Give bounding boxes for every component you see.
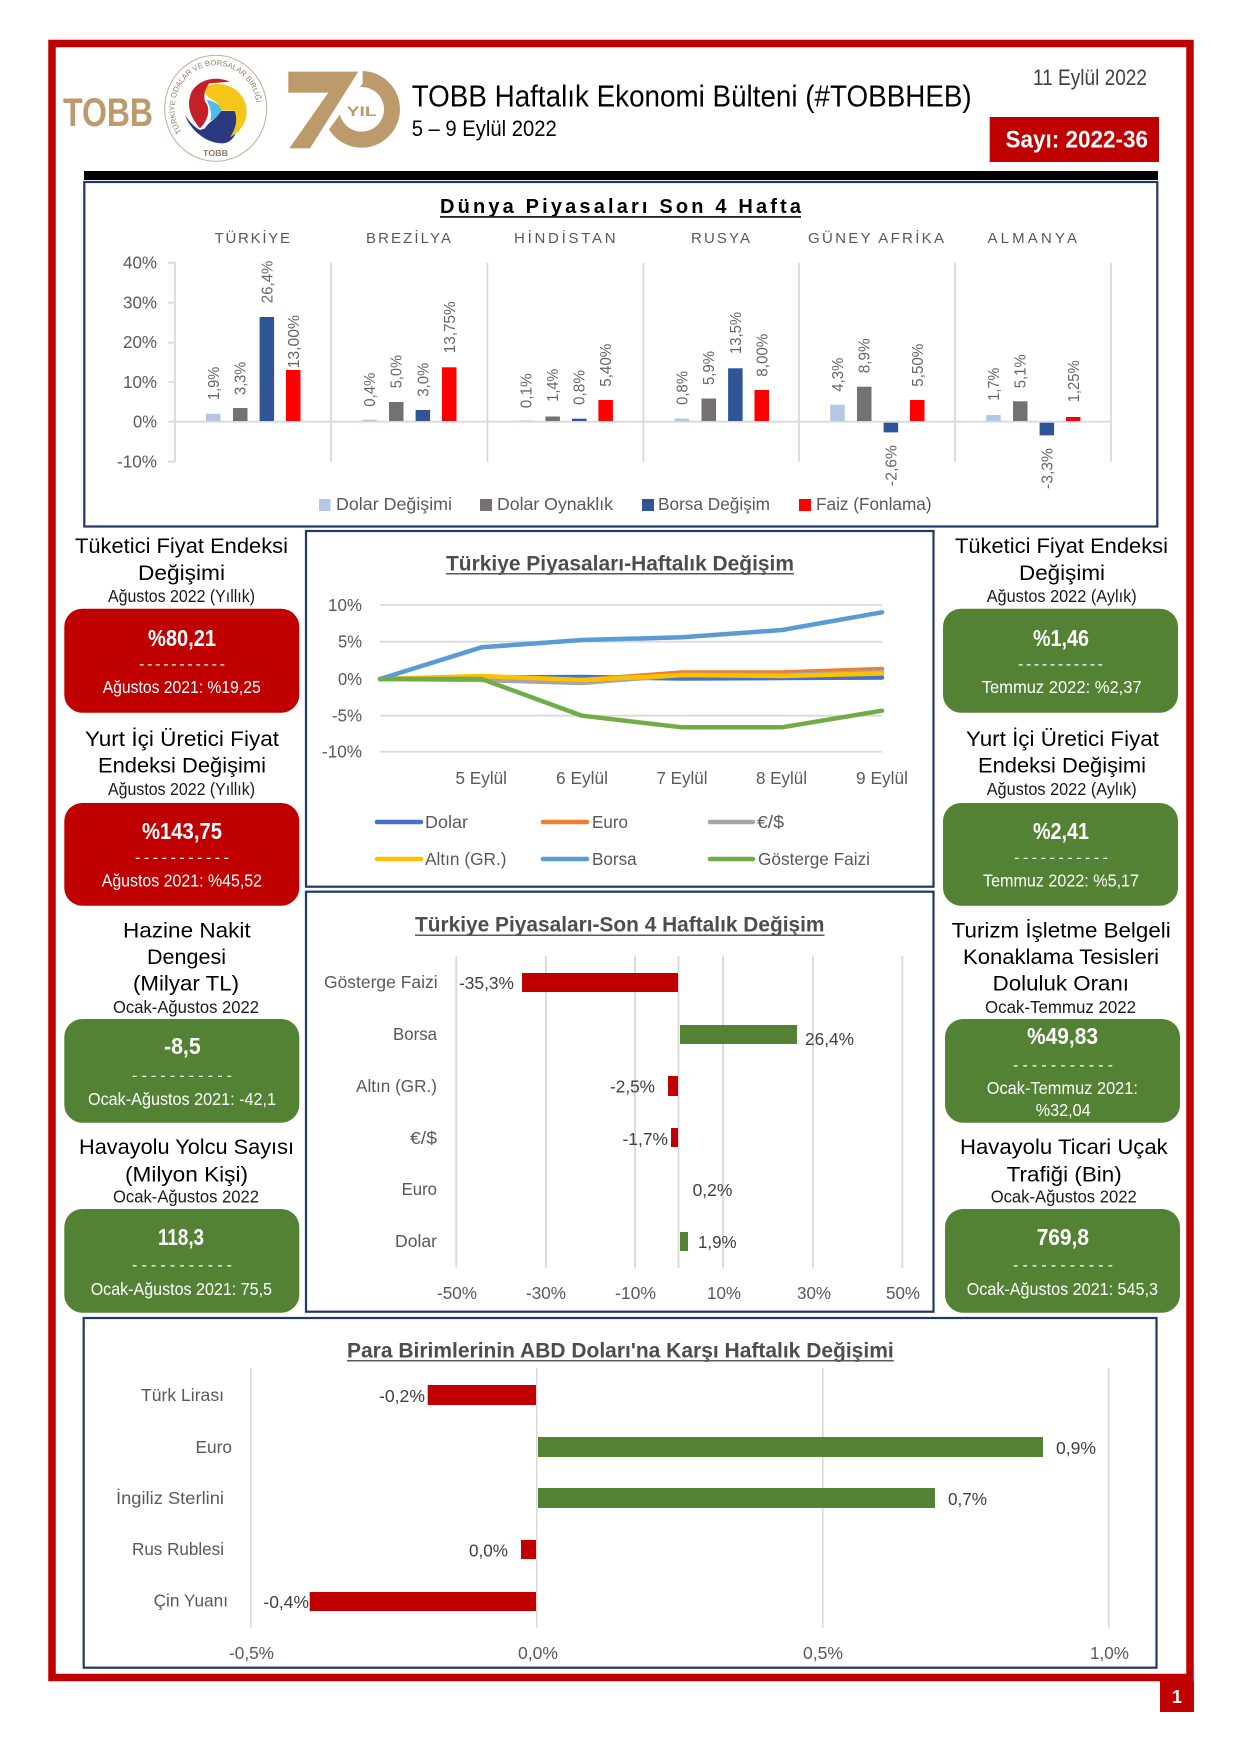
stat: Yİ-ÜFE aylık: Yurt İçi Üretici Fiyat bbox=[966, 728, 1159, 751]
logo: 70 yıl: YIL bbox=[347, 103, 377, 119]
x axis labels: -10% bbox=[615, 1283, 656, 1303]
bars: Rusya: 5,9% bbox=[701, 351, 718, 385]
stat: TÜFE aylık: Temmuz 2022: %2,37 bbox=[982, 677, 1142, 697]
country labels: GÜNEY AFRİKA bbox=[808, 229, 944, 247]
panel: 4-week bar chart bbox=[306, 892, 934, 1312]
stat: TÜFE yıllık: %80,21 bbox=[148, 625, 216, 651]
stat: Hazine nakit dengesi: Dengesi bbox=[147, 946, 226, 969]
x axis labels: 6 Eylül bbox=[556, 768, 608, 788]
bars: Güney Afrika: 8,9% bbox=[857, 338, 874, 373]
heading: 4-week change: Türkiye Piyasaları-Son 4 Haftalık Değişim bbox=[415, 914, 824, 937]
x axis labels: 9 Eylül bbox=[856, 768, 908, 788]
value labels: 1,9% bbox=[698, 1232, 737, 1252]
category labels: Çin Yuanı bbox=[154, 1591, 228, 1611]
category labels: Borsa bbox=[393, 1024, 437, 1044]
y axis labels: -5% bbox=[332, 706, 362, 726]
y axis labels bbox=[322, 595, 362, 762]
stat: TÜFE yıllık: ----------- bbox=[139, 656, 225, 673]
bars: Rusya: 13,5% bbox=[728, 312, 745, 354]
bars bbox=[522, 973, 797, 1251]
value labels: 26,4% bbox=[805, 1029, 854, 1049]
bars: Güney Afrika: -2,6% bbox=[883, 445, 900, 486]
bars: Hindistan: 5,40% bbox=[598, 343, 615, 387]
category labels: €/$ bbox=[410, 1128, 437, 1148]
x axis labels bbox=[456, 768, 908, 788]
heading: world markets: Dünya Piyasaları Son 4 Hafta bbox=[440, 196, 802, 218]
panel: weekly line chart bbox=[306, 531, 934, 887]
stat: Havayolu yolcu sayısı: ----------- bbox=[132, 1257, 232, 1274]
bars: Almanya bbox=[986, 354, 1083, 489]
stat: Hazine nakit dengesi: Hazine Nakit bbox=[123, 920, 251, 943]
stat: TÜFE aylık: %1,46 bbox=[1033, 625, 1089, 651]
logo: TOBB seal bbox=[164, 54, 268, 162]
value labels: 0,0% bbox=[469, 1541, 508, 1561]
country labels: BREZİLYA bbox=[366, 229, 451, 247]
bars: Rusya bbox=[674, 312, 771, 421]
panel: currencies bar chart bbox=[84, 1318, 1157, 1668]
stat: Yİ-ÜFE yıllık: Ağustos 2021: %45,52 bbox=[102, 871, 262, 891]
stat: TÜFE yıllık bbox=[64, 535, 299, 713]
stat: TÜFE aylık: ----------- bbox=[1018, 656, 1103, 673]
y axis labels: 10% bbox=[328, 595, 362, 615]
logo: 70 yıl bbox=[283, 68, 400, 150]
stat: Yİ-ÜFE yıllık bbox=[64, 728, 299, 906]
x axis labels: -30% bbox=[526, 1283, 566, 1303]
stat: Turizm doluluk oranı: Konaklama Tesisleri bbox=[963, 946, 1159, 969]
value labels: -1,7% bbox=[622, 1129, 668, 1149]
stat: Turizm doluluk oranı: %49,83 bbox=[1027, 1023, 1098, 1049]
x axis labels: 8 Eylül bbox=[756, 768, 807, 788]
x axis labels: 30% bbox=[797, 1283, 831, 1303]
legend: Euro bbox=[592, 812, 628, 832]
bars: Almanya: 5,1% bbox=[1013, 354, 1030, 388]
bars: Hindistan: 0,8% bbox=[572, 370, 589, 405]
stat: Yİ-ÜFE aylık bbox=[943, 728, 1178, 906]
stat: Turizm doluluk oranı: Ocak-Temmuz 2021: bbox=[987, 1078, 1138, 1098]
country labels: TÜRKİYE bbox=[215, 229, 290, 247]
bars: Brezilya bbox=[362, 301, 459, 421]
stat: TÜFE aylık: Tüketici Fiyat Endeksi bbox=[955, 535, 1168, 558]
bars: Almanya: 1,7% bbox=[986, 368, 1003, 401]
stat: Havayolu ticari uçak trafiği bbox=[945, 1136, 1180, 1313]
y axis labels: 5% bbox=[338, 632, 362, 652]
stat: Hazine nakit dengesi: (Milyar TL) bbox=[133, 973, 239, 996]
stat: Turizm doluluk oranı bbox=[945, 920, 1180, 1123]
category labels: Altın (GR.) bbox=[356, 1076, 437, 1096]
x axis labels: 5 Eylül bbox=[456, 768, 507, 788]
stat: Havayolu ticari uçak trafiği: 769,8 bbox=[1037, 1224, 1089, 1250]
y axis labels: 0% bbox=[133, 412, 157, 432]
bars: Brezilya: 5,0% bbox=[389, 355, 406, 388]
stat: Havayolu yolcu sayısı: (Milyon Kişi) bbox=[125, 1164, 248, 1187]
bars: Almanya: -3,3% bbox=[1039, 448, 1056, 489]
legend: Dolar Değişimi bbox=[336, 494, 452, 514]
legend: Faiz (Fonlama) bbox=[816, 494, 932, 514]
x axis labels: 7 Eylül bbox=[656, 768, 708, 788]
stat: Yİ-ÜFE yıllık: %143,75 bbox=[142, 818, 222, 844]
y axis labels: -10% bbox=[117, 452, 157, 472]
stat: Yİ-ÜFE yıllık: ----------- bbox=[135, 850, 229, 867]
stat: TÜFE yıllık: Ağustos 2022 (Yıllık) bbox=[108, 586, 255, 606]
category labels bbox=[324, 972, 438, 1251]
stat: Turizm doluluk oranı: %32,04 bbox=[1036, 1100, 1091, 1120]
bars: Türkiye: 3,3% bbox=[233, 362, 250, 395]
bars: Türkiye: 26,4% bbox=[259, 260, 276, 303]
bars: Brezilya: 0,4% bbox=[362, 373, 379, 407]
value labels: 0,7% bbox=[948, 1489, 987, 1509]
stat: Yİ-ÜFE aylık: Temmuz 2022: %5,17 bbox=[983, 871, 1139, 891]
stat: Yİ-ÜFE aylık: ----------- bbox=[1014, 850, 1108, 867]
value labels: 0,9% bbox=[1056, 1438, 1096, 1458]
stat: Yİ-ÜFE aylık: Ağustos 2022 (Aylık) bbox=[987, 779, 1137, 799]
x axis labels bbox=[229, 1643, 1129, 1663]
y axis labels: 40% bbox=[123, 253, 157, 273]
stat: Havayolu yolcu sayısı bbox=[64, 1136, 299, 1313]
country labels: ALMANYA bbox=[988, 230, 1077, 247]
stat: Yİ-ÜFE yıllık: Endeksi Değişimi bbox=[98, 755, 266, 778]
stat: Havayolu yolcu sayısı: Havayolu Yolcu Sayısı bbox=[79, 1136, 294, 1159]
y axis labels: 10% bbox=[123, 372, 157, 392]
stat: Havayolu ticari uçak trafiği: ----------- bbox=[1013, 1257, 1113, 1274]
stat: Turizm doluluk oranı: ----------- bbox=[1013, 1057, 1113, 1074]
value labels bbox=[459, 973, 854, 1252]
category labels: Gösterge Faizi bbox=[324, 972, 438, 992]
stat: Havayolu yolcu sayısı: Ocak-Ağustos 2021: 75,5 bbox=[91, 1279, 272, 1299]
legend bbox=[377, 812, 870, 869]
legend: Gösterge Faizi bbox=[758, 849, 870, 869]
issue badge bbox=[990, 117, 1159, 162]
y axis labels: 20% bbox=[123, 332, 157, 352]
x axis labels: 1,0% bbox=[1090, 1643, 1129, 1663]
logo: TOBB seal: TÜRKİYE ODALAR VE BORSALAR BİRLİĞİ bbox=[168, 60, 263, 135]
x axis labels: 0,0% bbox=[518, 1643, 558, 1663]
value labels: 0,2% bbox=[693, 1180, 732, 1200]
stat: Havayolu yolcu sayısı: 118,3 bbox=[158, 1224, 204, 1250]
value labels bbox=[263, 1386, 1096, 1612]
stat: Turizm doluluk oranı: Ocak-Temmuz 2022 bbox=[985, 997, 1136, 1017]
bars: Güney Afrika: 4,3% bbox=[830, 358, 847, 392]
value labels: -0,4% bbox=[263, 1592, 309, 1612]
y axis labels: 30% bbox=[123, 293, 157, 313]
bars: Hindistan: 0,1% bbox=[518, 373, 535, 408]
panel: world markets bbox=[84, 182, 1157, 526]
stat: Turizm doluluk oranı: Doluluk Oranı bbox=[993, 973, 1129, 996]
x axis labels: 0,5% bbox=[803, 1643, 843, 1663]
header bbox=[63, 54, 1159, 162]
value labels: -35,3% bbox=[459, 973, 514, 993]
bars: Türkiye: 13,00% bbox=[286, 315, 303, 368]
bars: Güney Afrika bbox=[830, 338, 927, 486]
bars: Brezilya: 3,0% bbox=[415, 363, 432, 397]
heading: weekly change: Türkiye Piyasaları-Haftalık Değişim bbox=[446, 553, 794, 576]
stat: Yİ-ÜFE yıllık: Yurt İçi Üretici Fiyat bbox=[85, 728, 279, 751]
stat: Havayolu yolcu sayısı: Ocak-Ağustos 2022 bbox=[113, 1187, 259, 1207]
country labels bbox=[215, 229, 1077, 247]
x axis labels: 50% bbox=[886, 1283, 920, 1303]
stat: Turizm doluluk oranı: Turizm İşletme Belgeli bbox=[952, 920, 1171, 943]
legend: Borsa Değişim bbox=[658, 494, 770, 514]
date: 11 Eylül 2022 bbox=[1033, 65, 1147, 90]
x axis labels: -0,5% bbox=[229, 1643, 274, 1663]
legend: €/$ bbox=[757, 812, 784, 832]
legend: Dolar Oynaklık bbox=[497, 494, 613, 514]
category labels: Dolar bbox=[395, 1231, 437, 1251]
stat: TÜFE yıllık: Ağustos 2021: %19,25 bbox=[103, 677, 261, 697]
stat: Yİ-ÜFE yıllık: Ağustos 2022 (Yıllık) bbox=[108, 779, 255, 799]
bars: Rusya: 0,8% bbox=[674, 371, 692, 405]
stat: Yİ-ÜFE aylık: Endeksi Değişimi bbox=[978, 755, 1146, 778]
bars: Almanya: 1,25% bbox=[1066, 360, 1083, 402]
legend: Altın (GR.) bbox=[425, 849, 506, 869]
page number bbox=[1160, 1681, 1194, 1712]
stat: Havayolu ticari uçak trafiği: Havayolu Ticari Uçak bbox=[960, 1136, 1168, 1159]
stat: Havayolu ticari uçak trafiği: Ocak-Ağustos 2022 bbox=[991, 1187, 1137, 1207]
stat: Hazine nakit dengesi: Ocak-Ağustos 2021: -42,1 bbox=[88, 1089, 276, 1109]
bars: Türkiye bbox=[206, 260, 303, 421]
bars bbox=[310, 1385, 1043, 1611]
category labels: Euro bbox=[196, 1437, 232, 1457]
category labels: Türk Lirası bbox=[141, 1385, 224, 1405]
category labels: Rus Rublesi bbox=[132, 1539, 224, 1559]
y axis labels: -10% bbox=[322, 742, 362, 762]
value labels: -2,5% bbox=[610, 1077, 655, 1097]
y axis labels: 0% bbox=[338, 669, 362, 689]
stat: Havayolu ticari uçak trafiği: Trafiği (Bin) bbox=[1007, 1164, 1122, 1187]
logo: TOBB wordmark: TOBB bbox=[63, 91, 153, 135]
bars: Hindistan: 1,4% bbox=[545, 369, 562, 402]
category labels: Euro bbox=[402, 1179, 437, 1199]
subtitle: date range: 5 – 9 Eylül 2022 bbox=[412, 116, 557, 141]
logo: TOBB seal: TOBB bbox=[203, 149, 228, 158]
bars: Türkiye: 1,9% bbox=[206, 367, 223, 400]
stat: Hazine nakit dengesi: ----------- bbox=[132, 1068, 232, 1085]
y axis labels bbox=[117, 253, 157, 472]
stat: TÜFE yıllık: Değişimi bbox=[138, 562, 225, 585]
bars: Hindistan bbox=[518, 343, 615, 421]
heading: currencies: Para Birimlerinin ABD Doları'na Karşı Haftalık Değişimi bbox=[347, 1340, 894, 1363]
stat: TÜFE aylık bbox=[943, 535, 1178, 713]
stat: Hazine nakit dengesi: Ocak-Ağustos 2022 bbox=[113, 997, 259, 1017]
x axis labels bbox=[437, 1283, 920, 1303]
grid and axes bbox=[168, 263, 1111, 462]
bars: Rusya: 8,00% bbox=[754, 333, 771, 377]
stat: TÜFE aylık: Değişimi bbox=[1019, 562, 1105, 585]
line chart series bbox=[380, 612, 882, 727]
page number: 1 bbox=[1172, 1687, 1182, 1707]
legend bbox=[319, 494, 932, 514]
bars: Güney Afrika: 5,50% bbox=[910, 343, 927, 387]
stat: Hazine nakit dengesi: -8,5 bbox=[164, 1033, 201, 1059]
category labels bbox=[116, 1385, 232, 1611]
stat: Havayolu ticari uçak trafiği: Ocak-Ağustos 2021: 545,3 bbox=[967, 1279, 1158, 1299]
title: TOBB Haftalık Ekonomi Bülteni (#TOBBHEB) bbox=[412, 79, 972, 114]
issue badge: Sayı: 2022-36 bbox=[1006, 127, 1148, 154]
stat: Hazine nakit dengesi bbox=[64, 920, 299, 1123]
value labels: -0,2% bbox=[379, 1386, 425, 1406]
legend: Dolar bbox=[425, 812, 468, 832]
category labels: İngiliz Sterlini bbox=[116, 1488, 224, 1508]
bars: Brezilya: 13,75% bbox=[442, 301, 459, 353]
country labels: HİNDİSTAN bbox=[514, 229, 616, 247]
stat: TÜFE aylık: Ağustos 2022 (Aylık) bbox=[987, 586, 1137, 606]
x axis labels: -50% bbox=[437, 1283, 477, 1303]
x axis labels: 10% bbox=[707, 1283, 741, 1303]
stat: TÜFE yıllık: Tüketici Fiyat Endeksi bbox=[75, 535, 288, 558]
stat: Yİ-ÜFE aylık: %2,41 bbox=[1033, 818, 1089, 844]
country labels: RUSYA bbox=[691, 230, 750, 247]
legend: Borsa bbox=[592, 849, 637, 869]
